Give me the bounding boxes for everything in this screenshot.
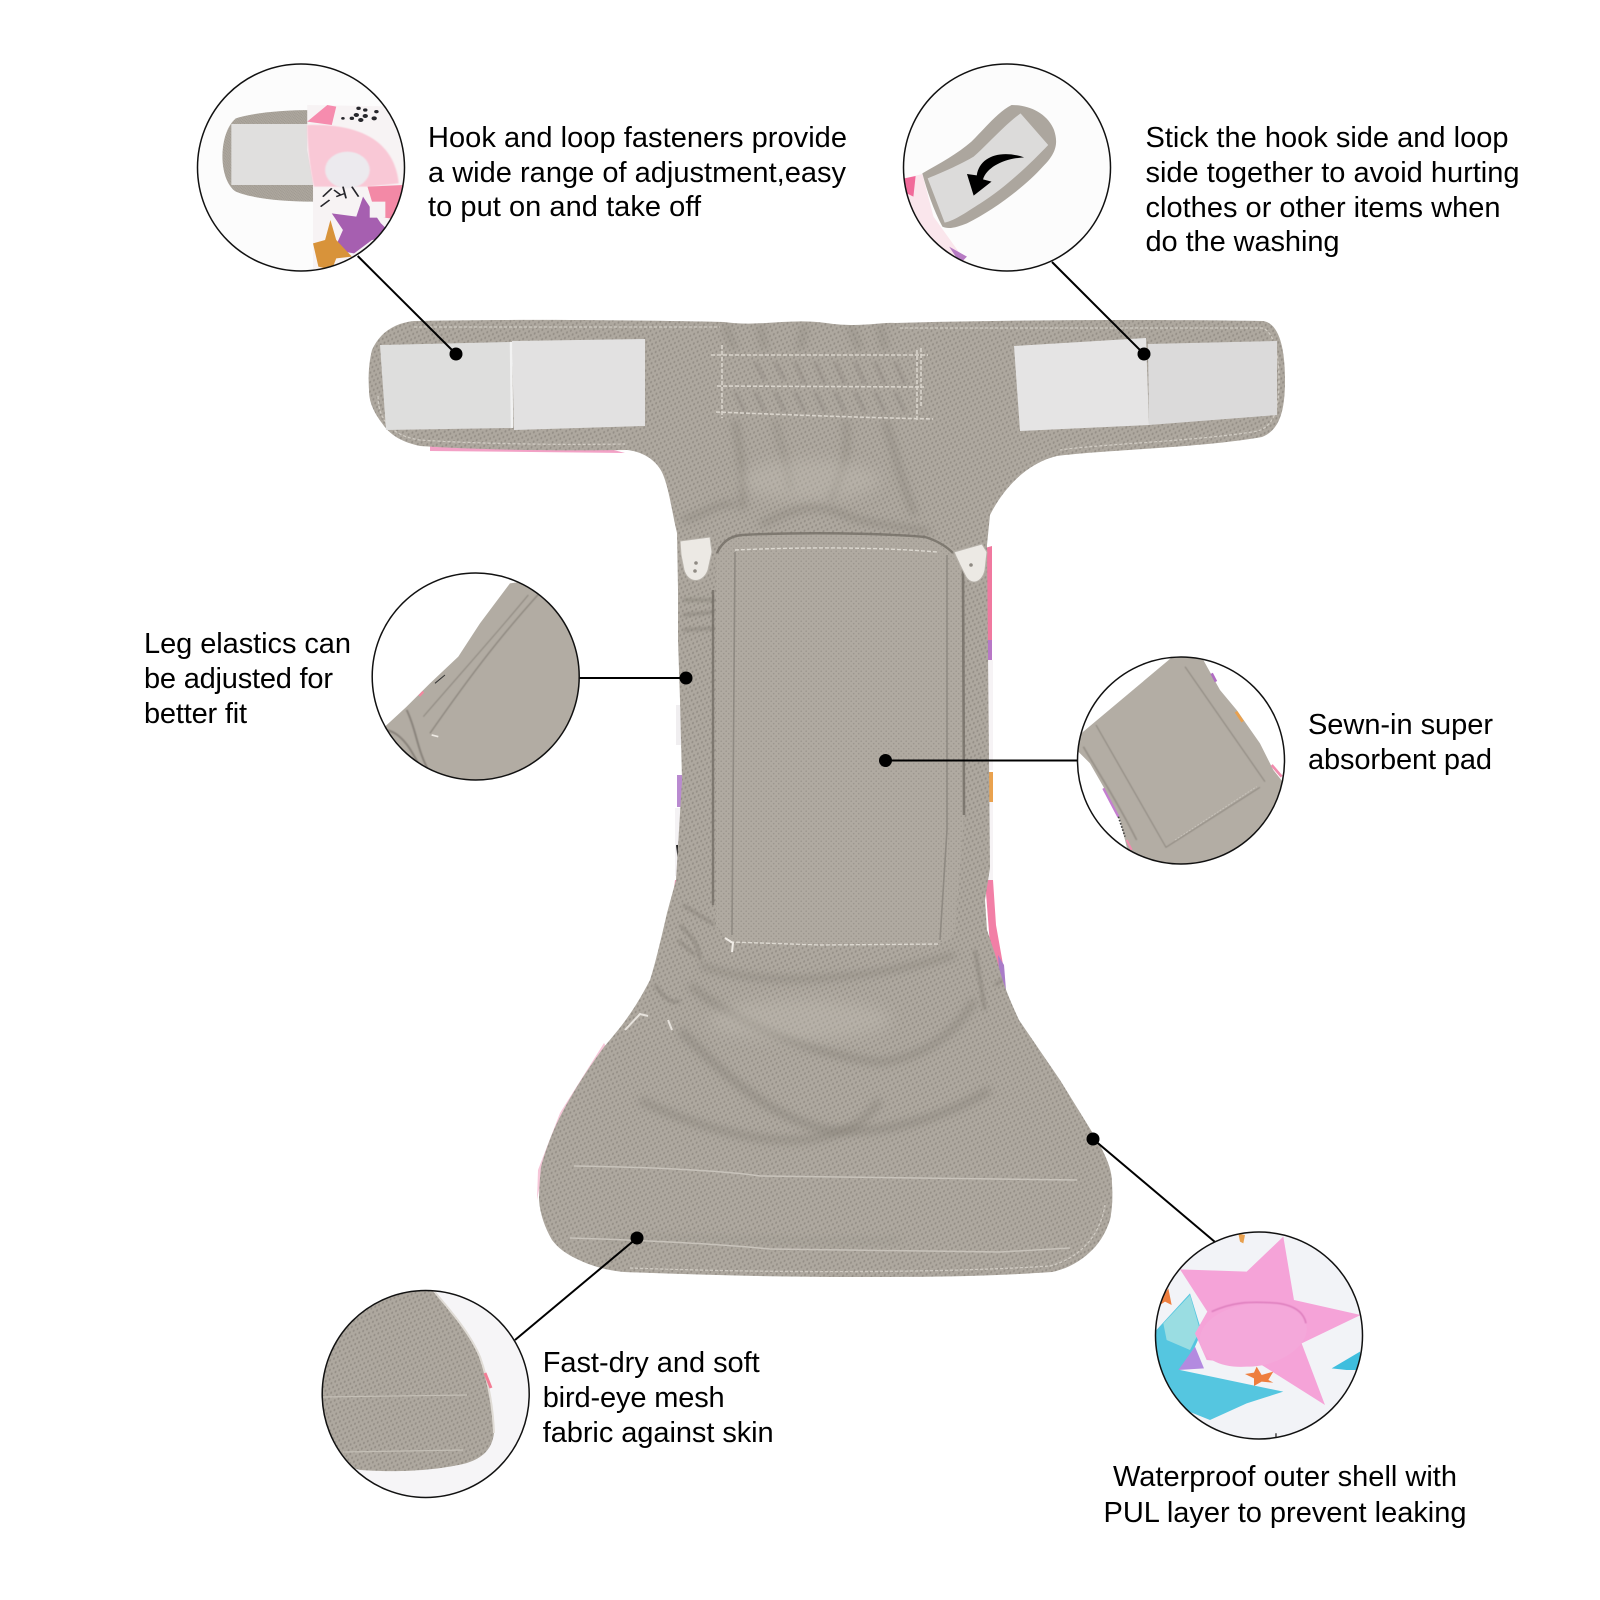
caption 5: Fast-dry and soft [543,1347,760,1379]
caption 5: fabric against skin [543,1417,774,1449]
callout 3: leg elastics [144,573,692,793]
caption 2: Stick the hook side and loop [1146,122,1508,154]
detail circle 1 [198,64,408,283]
caption 3 [144,628,351,730]
leader dot 3 [680,672,692,684]
caption 4: absorbent pad [1308,744,1492,776]
leader dot 5 [630,1232,644,1244]
caption 3: better fit [144,698,247,730]
mesh fabric body [369,320,1285,1277]
caption 2: side together to avoid hurting [1146,157,1520,189]
leader line 4 [886,760,1077,762]
back tab stitch lines [570,1166,1077,1252]
caption 6: PUL layer to prevent leaking [1104,1497,1466,1529]
caption 1: Hook and loop fasteners provide [428,122,847,154]
detail circle 5 [317,1290,529,1498]
outer printed shell slivers [430,446,1006,1200]
diaper product [369,320,1285,1277]
leader dot 4 [879,754,892,767]
caption 2: clothes or other items when [1146,192,1500,224]
caption 1: a wide range of adjustment,easy [428,157,846,189]
leader dot 6 [1086,1132,1100,1146]
waist elastic panel [711,345,933,422]
detail circle 2 [900,64,1110,271]
leader line 3 [579,677,686,679]
caption 3: Leg elastics can [144,628,351,660]
callout 2: stick together [900,64,1520,360]
snap clip right [954,544,987,582]
leader line 1 [358,256,456,354]
hook and loop velcro right [1014,338,1277,431]
caption 4: Sewn-in super [1308,709,1493,741]
leader line 5 [515,1238,637,1340]
fabric fold shading [641,328,1003,1144]
seam stitch along edges [378,327,1279,1272]
callout 4: absorbent pad [879,653,1493,873]
snap clip left [680,537,712,580]
caption 3: be adjusted for [144,663,333,695]
callout 5: mesh fabric [317,1232,774,1498]
detail circle 4 [1073,653,1287,873]
leader line 6 [1093,1139,1215,1242]
leader dot 1 [450,348,462,360]
caption 2: do the washing [1146,226,1340,258]
detail circle 3 [371,572,580,781]
loose thread marks [625,1014,672,1030]
detail circle 6 [1153,1232,1363,1440]
leader dot 2 [1138,348,1150,360]
caption 1: to put on and take off [428,191,702,223]
caption 6: Waterproof outer shell with [1113,1461,1457,1493]
callout 1: hook and loop [198,64,847,360]
caption 5 [543,1347,774,1449]
caption 5: bird-eye mesh [543,1382,725,1414]
absorbent pad [713,533,964,952]
caption 2 [1146,122,1520,258]
caption 4 [1308,709,1493,776]
caption 1 [428,122,847,223]
hook and loop velcro left [380,339,645,430]
caption 6 [1104,1461,1466,1529]
callout 6: waterproof shell [1086,1132,1466,1529]
leader line 2 [1052,262,1144,354]
